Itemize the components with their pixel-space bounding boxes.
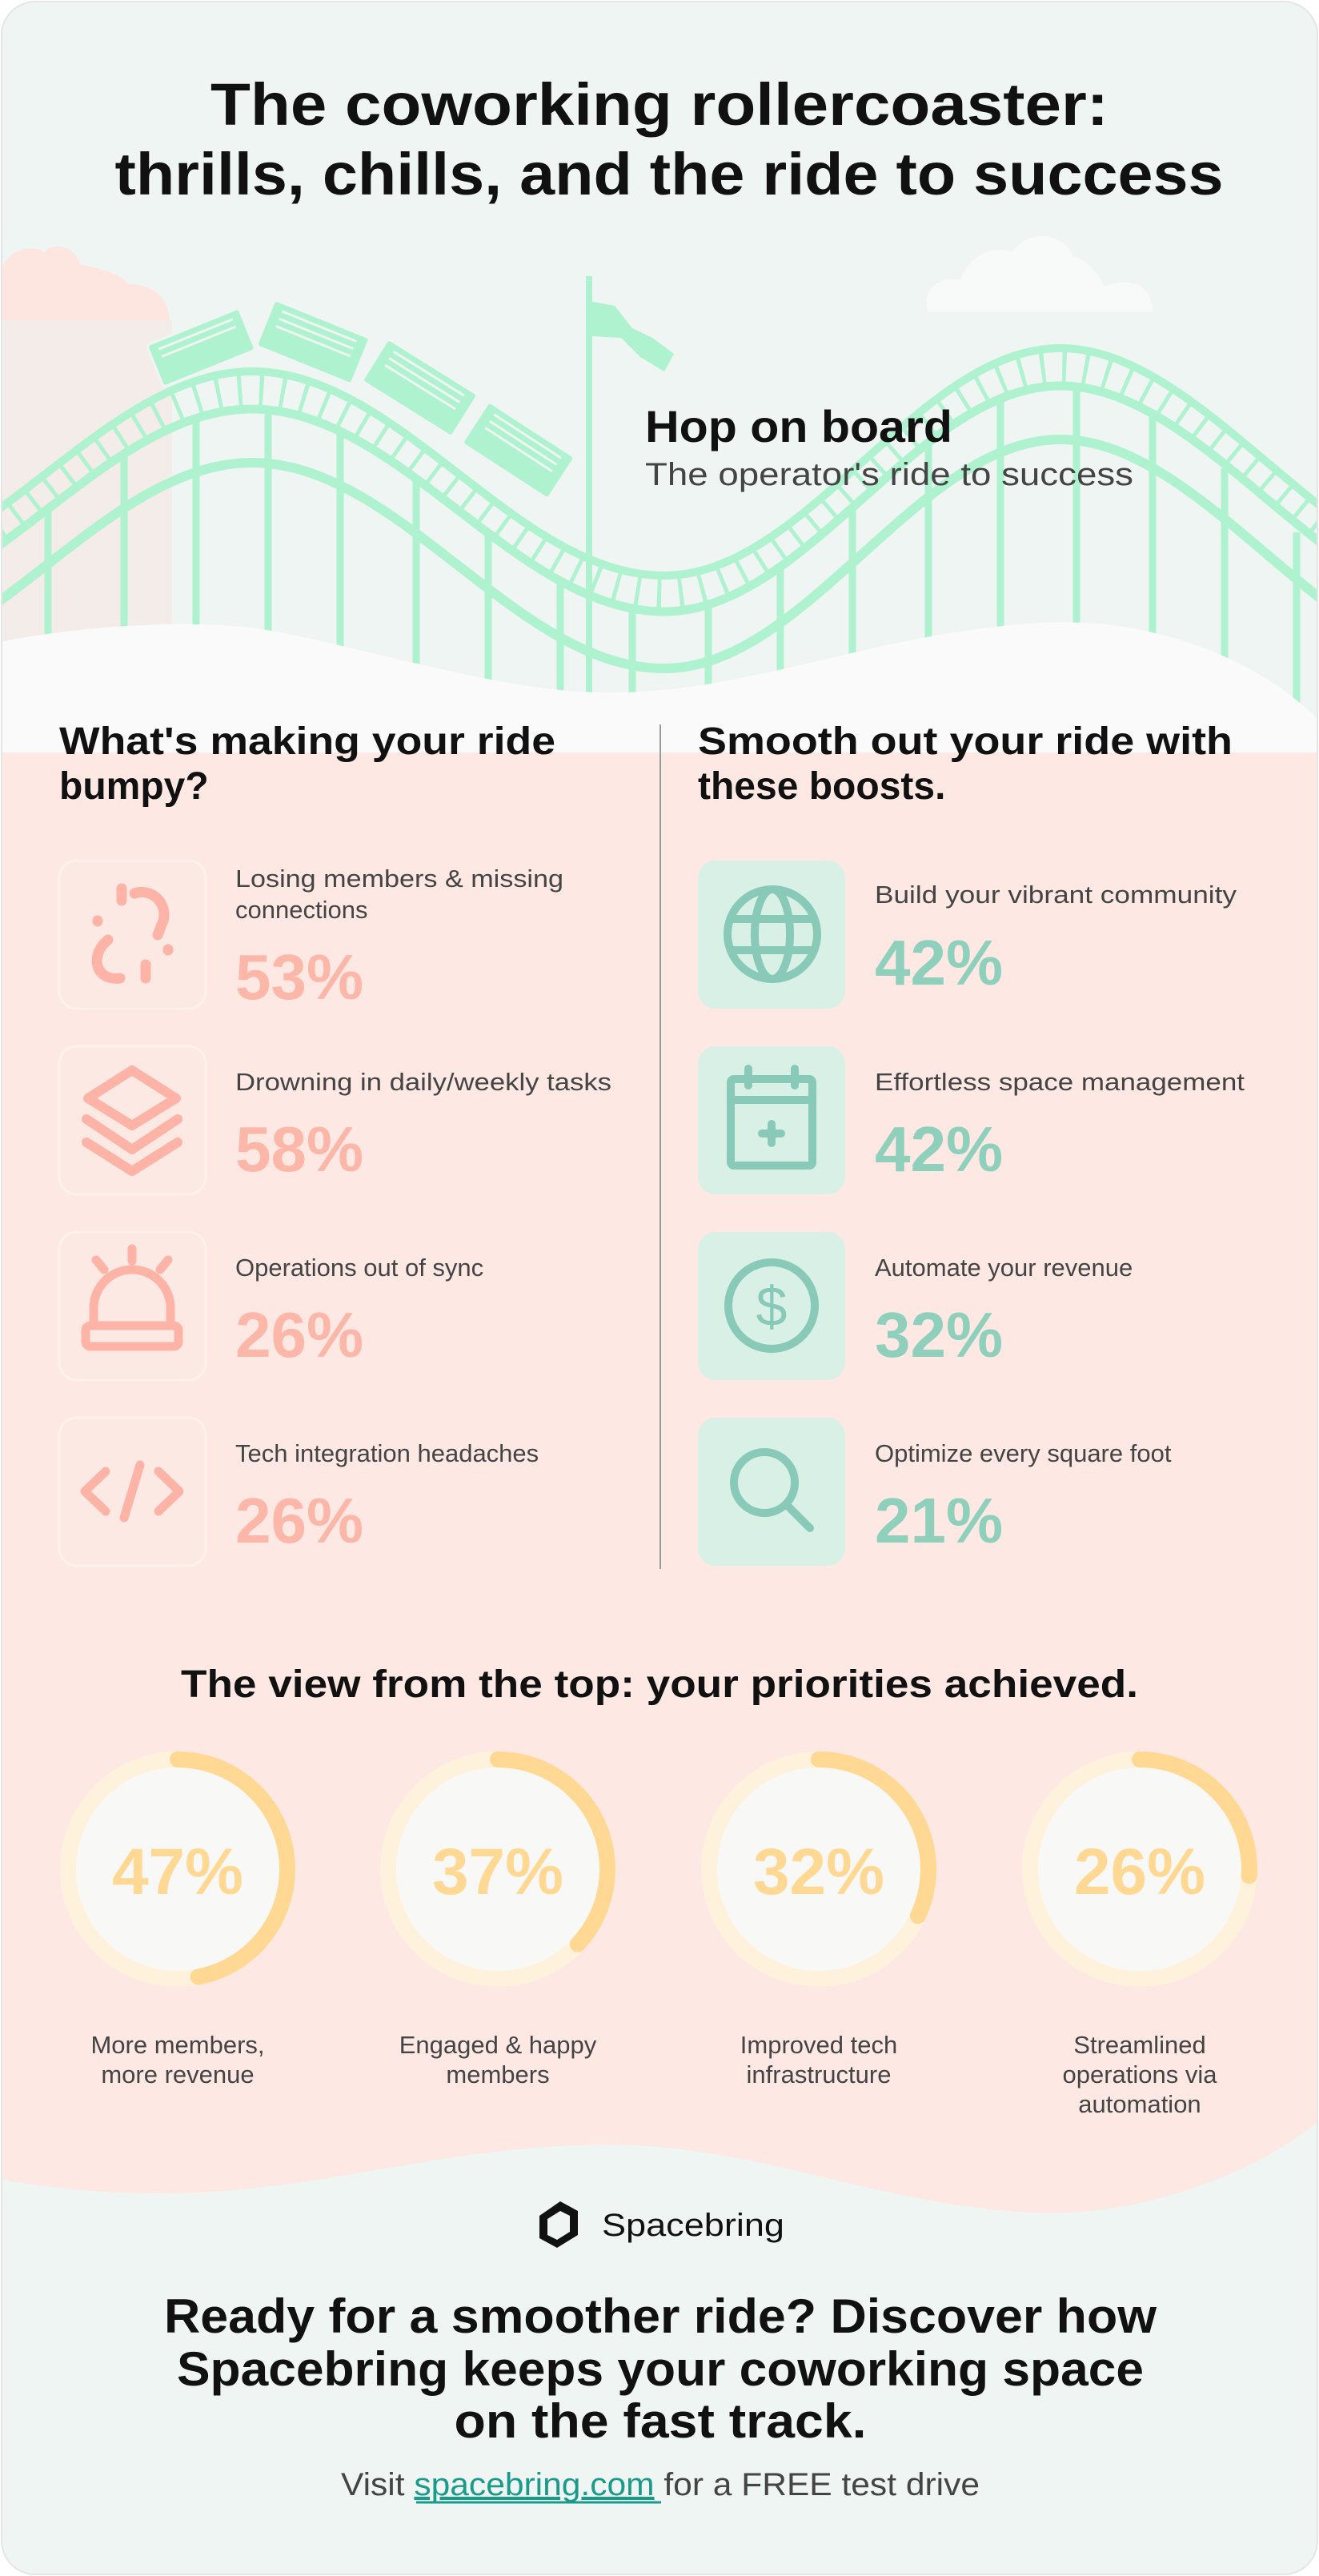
donut: 32%: infrastructure — [747, 2060, 891, 2088]
card: space management: Effortless space management — [875, 1068, 1245, 1096]
hop on board heading — [646, 410, 1132, 492]
donut: 47%: 47% — [112, 1836, 243, 1908]
rollercoaster illustration — [0, 348, 1319, 704]
pink content panel — [0, 748, 1319, 2213]
card: space management — [698, 1046, 1245, 1194]
donut: 47%: More members, — [90, 2031, 265, 2059]
card: losing members — [59, 861, 563, 1013]
donut: 26% — [1030, 1759, 1249, 2118]
card: operations out of sync: 26% — [235, 1299, 363, 1370]
icon: alarm bell — [86, 1249, 178, 1346]
decorative pink building top-left — [2, 247, 172, 641]
icon: magnifier — [734, 1452, 810, 1528]
donut: 37%: Engaged & happy — [399, 2031, 597, 2059]
icon: globe — [728, 889, 817, 979]
card: tech integration: Tech integration headaches — [235, 1439, 539, 1467]
white hills — [2, 623, 1317, 720]
logo: Spacebring: Spacebring — [602, 2208, 784, 2243]
hop on board heading: Hop on board — [645, 401, 952, 451]
donut: 47% — [68, 1759, 287, 2088]
card: revenue — [698, 1232, 1133, 1380]
icon: broken link — [97, 889, 168, 978]
heading: boosts: Smooth out your ride with — [698, 720, 1233, 763]
card: drowning in tasks: 58% — [235, 1113, 363, 1185]
card: revenue: Automate your revenue — [875, 1254, 1133, 1282]
donut: 26%: automation — [1078, 2090, 1201, 2118]
heading: bumpy: What's making your ride — [59, 720, 555, 763]
card: community — [698, 861, 1237, 1009]
donut: 37%: 37% — [432, 1836, 563, 1908]
donut: 32% — [709, 1759, 928, 2088]
donut: 37% — [388, 1759, 607, 2088]
card: losing members: connections — [235, 896, 367, 924]
decorative cloud right — [927, 236, 1153, 312]
call to action: Ready for a smoother ride? Discover how — [164, 2289, 1157, 2343]
donut: 32%: 32% — [753, 1836, 884, 1908]
icon: dollar: $ — [756, 1275, 787, 1338]
card: community: 42% — [875, 927, 1003, 998]
heading: priorities: The view from the top: your priorities achieved. — [181, 1663, 1138, 1706]
icon: dollar — [728, 1262, 815, 1349]
card: square foot: 21% — [875, 1485, 1003, 1556]
call to action: on the fast track. — [455, 2394, 866, 2448]
donut: 26%: operations via — [1062, 2060, 1217, 2088]
card: drowning in tasks — [59, 1046, 611, 1194]
donut: 47%: more revenue — [101, 2060, 255, 2088]
donut: 37%: members — [446, 2060, 550, 2088]
logo: Spacebring — [539, 2201, 784, 2248]
card: drowning in tasks: Drowning in daily/weekly tasks — [235, 1068, 611, 1096]
call to action — [167, 2297, 1157, 2438]
hop on board heading: The operator's ride to success — [645, 457, 1133, 492]
coaster cars — [146, 300, 575, 499]
title: The coworking rollercoaster: — [210, 71, 1109, 138]
heading: boosts: these boosts. — [698, 765, 945, 808]
donut: 26%: 26% — [1074, 1836, 1205, 1908]
card: tech integration — [59, 1418, 539, 1566]
card: operations out of sync: Operations out of sync — [235, 1254, 483, 1282]
icon: calendar — [731, 1069, 812, 1166]
heading: bumpy: bumpy? — [59, 765, 209, 808]
card: revenue: 32% — [875, 1299, 1003, 1370]
title — [115, 82, 1221, 203]
card: space management: 42% — [875, 1113, 1003, 1185]
card: losing members: 53% — [235, 941, 363, 1013]
title: thrills, chills, and the ride to success — [115, 141, 1223, 207]
card: tech integration: 26% — [235, 1485, 363, 1556]
donut: 32%: Improved tech — [740, 2031, 897, 2059]
card: square foot — [698, 1418, 1172, 1566]
card: losing members: Losing members & missing — [235, 865, 563, 893]
icon: code — [85, 1465, 179, 1518]
heading: bumpy — [59, 720, 555, 808]
heading: boosts — [698, 726, 1230, 799]
card: square foot: Optimize every square foot — [875, 1439, 1172, 1467]
card: operations out of sync — [59, 1232, 483, 1380]
icon: layers — [86, 1070, 178, 1171]
flag — [586, 276, 674, 696]
visit link: Visit spacebring.com for a FREE test drive — [341, 2467, 980, 2502]
donut: 26%: Streamlined — [1073, 2031, 1206, 2059]
call to action: Spacebring keeps your coworking space — [177, 2342, 1144, 2396]
card: community: Build your vibrant community — [875, 881, 1237, 909]
